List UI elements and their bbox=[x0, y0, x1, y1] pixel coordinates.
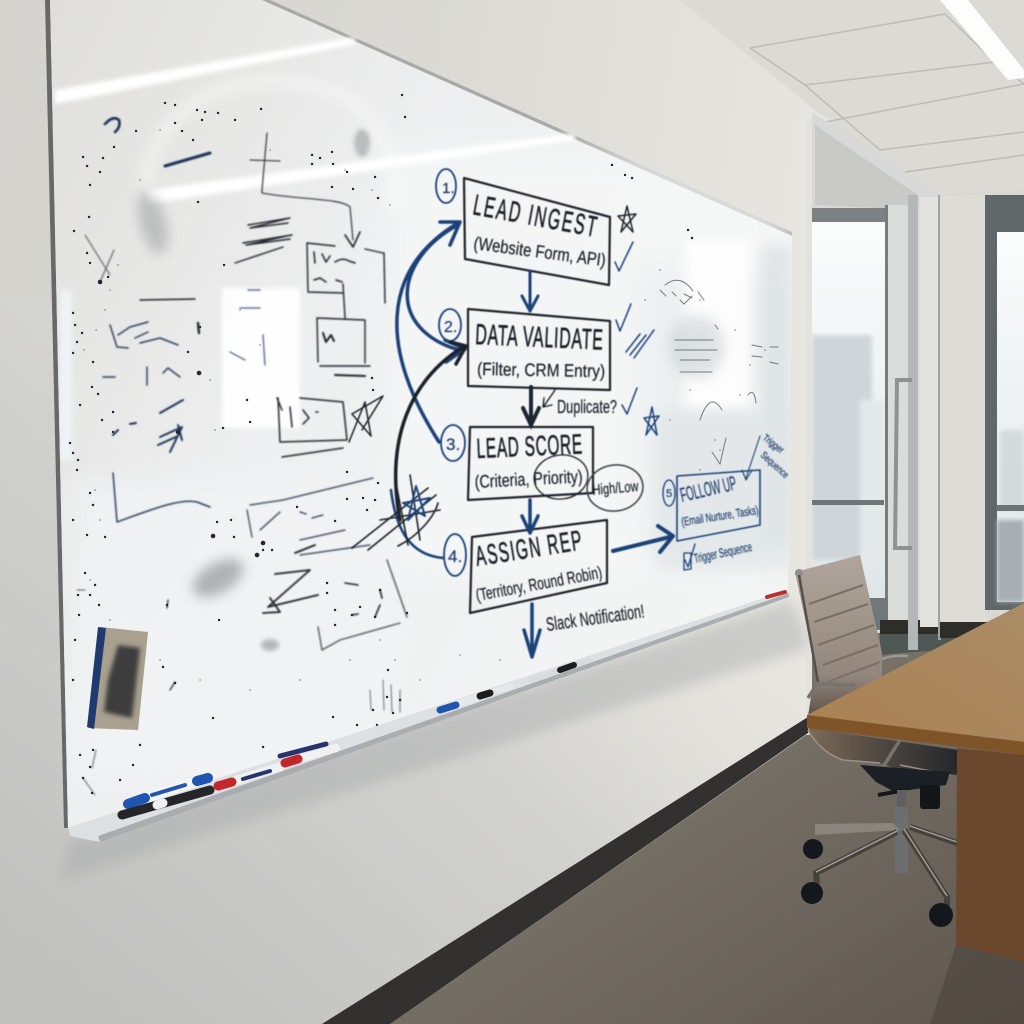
conference table bbox=[807, 603, 1024, 962]
board shadow on wall bbox=[60, 600, 806, 880]
note: slack notification: Slack Notification! bbox=[545, 601, 646, 636]
marker: black right bbox=[532, 660, 590, 680]
note: duplicate: Duplicate? bbox=[557, 397, 617, 417]
step 2: data validate: 2. bbox=[444, 319, 457, 336]
arrow: blue loop from step 1 to step 2 bbox=[407, 226, 465, 362]
step 5: follow up: FOLLOW UP bbox=[678, 473, 739, 507]
note: trigger sequence pointer: Sequence bbox=[758, 450, 791, 481]
glass partition and windows bbox=[812, 112, 1024, 655]
marker speckles bbox=[70, 95, 765, 793]
star: mid right bbox=[644, 407, 659, 435]
table top bbox=[807, 603, 1024, 742]
markers bbox=[122, 592, 785, 815]
table base bbox=[956, 748, 1024, 962]
step 1: lead ingest: 1. bbox=[442, 180, 455, 197]
step 1: lead ingest: (Website Form, API) bbox=[472, 233, 607, 270]
chair bbox=[795, 555, 958, 927]
marker: blue mid bbox=[440, 698, 476, 710]
step 2: data validate bbox=[439, 309, 610, 390]
marker: red far bbox=[767, 592, 785, 597]
arrow: blue lower loop to step 4 bbox=[391, 490, 443, 558]
marker: red and white bbox=[285, 748, 336, 763]
chair mechanism bbox=[860, 765, 950, 809]
note: trigger sequence with checkbox bbox=[684, 539, 753, 570]
flowchart bbox=[349, 169, 791, 657]
chair back bbox=[795, 555, 908, 716]
step 4: assign rep: ASSIGN REP bbox=[473, 525, 584, 572]
note: trigger sequence pointer bbox=[742, 433, 791, 481]
chair seat bbox=[808, 728, 958, 775]
arrow: black loop from step 4 to step 2 bbox=[396, 342, 466, 520]
chair base bbox=[801, 790, 957, 927]
step 3: lead score: High/Low bbox=[592, 478, 639, 499]
arrow: step 4 to step 5 bbox=[613, 526, 673, 552]
board glare and reflections bbox=[55, 37, 790, 780]
marker: red bbox=[218, 767, 280, 786]
note: trigger sequence with checkbox: Trigger Sequence bbox=[693, 539, 753, 566]
marker tray bbox=[68, 590, 789, 842]
star: top right bbox=[618, 206, 636, 232]
floor bbox=[390, 620, 1024, 1024]
star: left of step 3 bbox=[349, 396, 383, 442]
step 3: lead score: 3. bbox=[446, 435, 460, 454]
step 3: lead score: (Criteria, Priority) bbox=[474, 466, 583, 492]
arrow: step 4 to slack bbox=[524, 604, 540, 657]
hatching bbox=[626, 330, 654, 358]
marker: navy behind bbox=[280, 744, 326, 756]
step 5: follow up bbox=[663, 470, 760, 541]
arrow: step 1 to step 2 bbox=[522, 272, 538, 311]
arrow: blue loop from step 3 to step 1 bbox=[397, 222, 460, 442]
step 5: follow up: 5 bbox=[666, 488, 672, 500]
step 5: follow up: (Email Nurture, Tasks) bbox=[680, 503, 760, 529]
marker: blue bbox=[128, 778, 208, 804]
old erased marks bbox=[77, 118, 407, 795]
baseboard bbox=[322, 717, 808, 1024]
floor shadow under table bbox=[930, 945, 1024, 1024]
step 2: data validate: (Filter, CRM Entry) bbox=[477, 359, 605, 381]
star: scribbled bbox=[352, 475, 440, 550]
step 4: assign rep bbox=[444, 520, 607, 613]
step 3: lead score: LEAD SCORE bbox=[476, 429, 583, 464]
table edge bbox=[807, 715, 1024, 755]
marker: black bbox=[122, 790, 210, 815]
step 1: lead ingest: LEAD INGEST bbox=[471, 188, 600, 243]
step 4: assign rep: (Territory, Round Robin) bbox=[474, 563, 604, 605]
marker: black mid bbox=[480, 686, 511, 696]
note: trigger sequence pointer: Trigger bbox=[760, 433, 786, 456]
note: duplicate bbox=[543, 390, 617, 417]
chair armrest bbox=[808, 684, 900, 767]
step 4: assign rep: 4. bbox=[448, 547, 462, 566]
step 1: lead ingest bbox=[436, 169, 610, 285]
whiteboard bbox=[45, 0, 792, 828]
check marks bbox=[615, 242, 637, 414]
step 3: lead score bbox=[441, 425, 646, 515]
arrow: step 2 to step 3 bbox=[523, 387, 539, 425]
faint notes on the right of the board bbox=[660, 280, 778, 464]
ceiling bbox=[680, 0, 1024, 195]
step 2: data validate: DATA VALIDATE bbox=[475, 318, 604, 356]
arrow: step 3 to step 4 bbox=[522, 500, 538, 533]
right wall edge bbox=[806, 115, 812, 735]
eraser bbox=[87, 627, 148, 730]
